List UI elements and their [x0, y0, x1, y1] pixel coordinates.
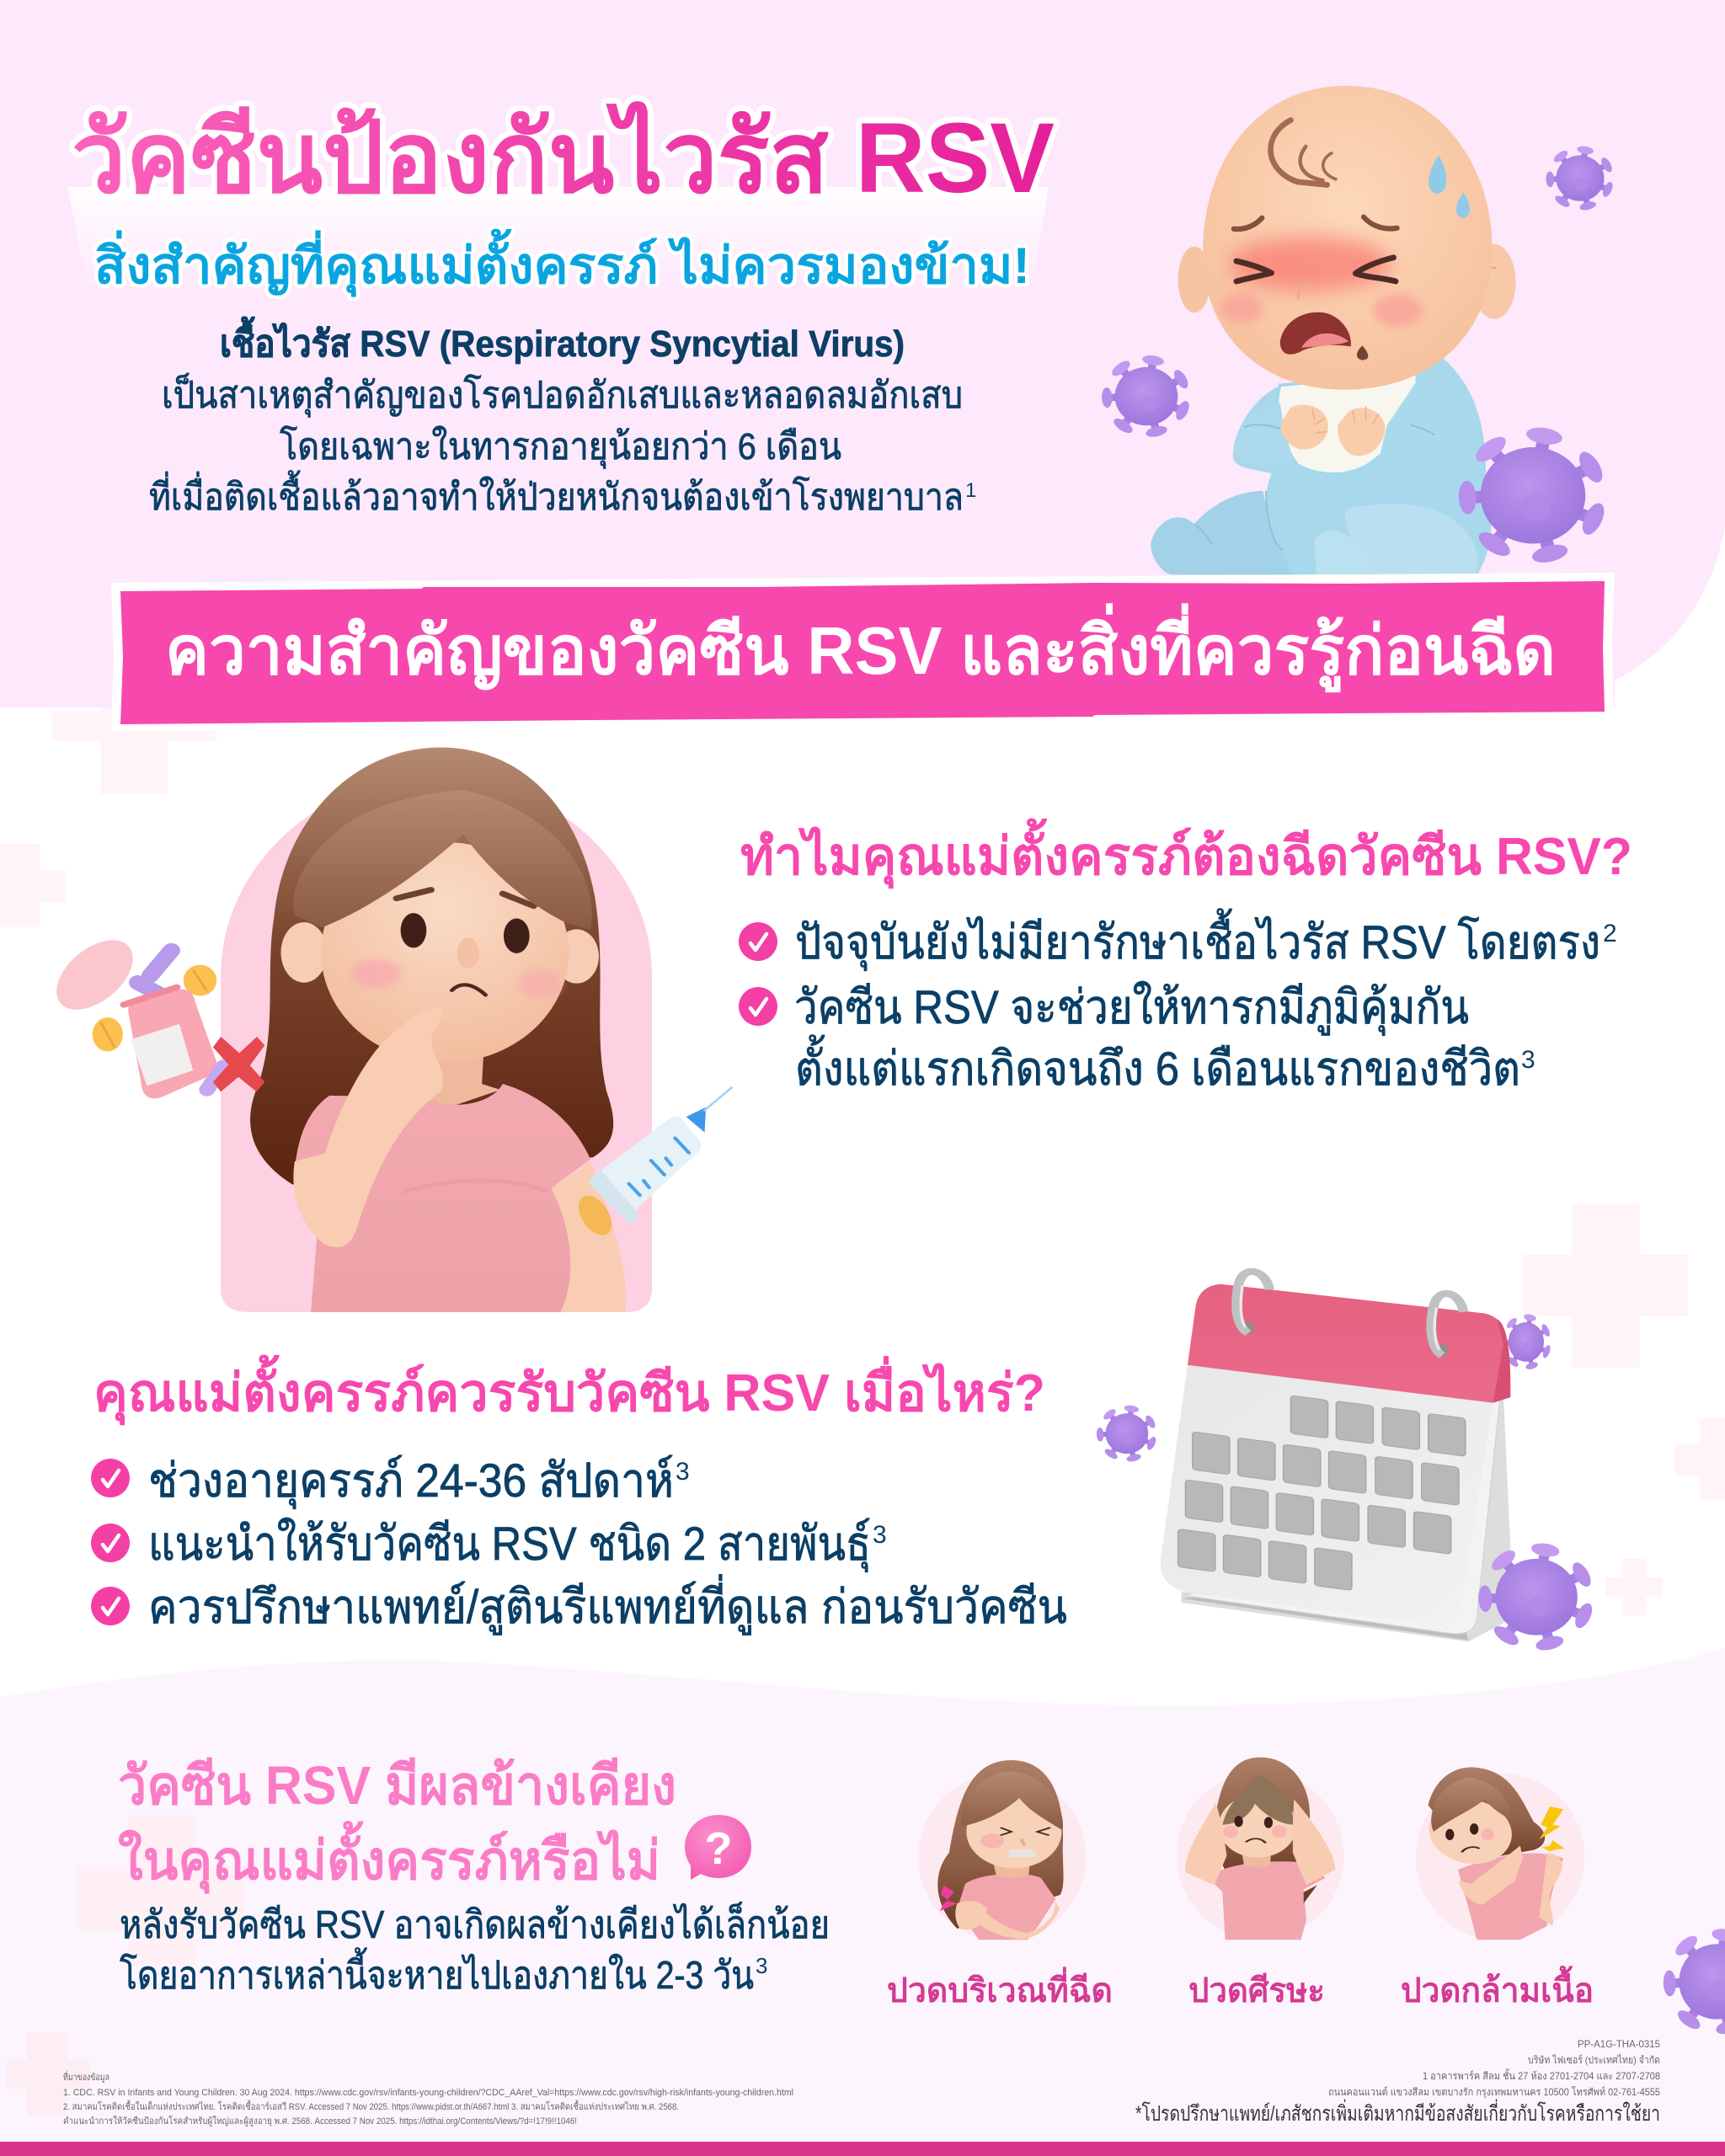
- intro text block: 1: [965, 479, 976, 502]
- side effects description: โดยอาการเหล่านี้จะหายไปเองภายใน 2-3 วัน: [120, 1947, 754, 1997]
- heading: when to vaccinate: คุณแม่ตั้งครรภ์ควรรับวัคซีน RSV เมื่อไหร่?: [93, 1354, 1045, 1425]
- company info: บริษัท ไฟเซอร์ (ประเทศไทย) จำกัด: [1528, 2054, 1660, 2066]
- virus large: [1458, 425, 1609, 566]
- illustration: desk calendar with viruses: [1097, 1272, 1595, 1652]
- title: วัคซีนป้องกันไวรัส RSV: [72, 101, 1055, 214]
- side effects description: [120, 1902, 830, 1997]
- timing list: 3: [873, 1521, 887, 1549]
- reasons list: วัคซีน RSV จะช่วยให้ทารกมีภูมิคุ้มกัน: [794, 980, 1469, 1036]
- icon: question bubble: [685, 1815, 751, 1880]
- company info: PP-A1G-THA-0315: [1578, 2038, 1660, 2050]
- baby arms and hands: [1234, 368, 1477, 473]
- icon: medicine bottle with X: [41, 928, 264, 1098]
- pink arch panel: [221, 775, 652, 1312]
- references: [63, 2070, 793, 2127]
- side effects description: หลังรับวัคซีน RSV อาจเกิดผลข้างเคียงได้เล็กน้อย: [120, 1902, 830, 1946]
- reasons list: ปัจจุบันยังไม่มียารักษาเชื้อไวรัส RSV โดยตรง: [795, 909, 1600, 971]
- heading: side effects: ในคุณแม่ตั้งครรภ์หรือไม่: [118, 1821, 660, 1894]
- virus left: [1102, 354, 1192, 439]
- baby legs and body: [1151, 355, 1492, 574]
- background: top pink blob: [0, 0, 1725, 707]
- hair back: [250, 748, 613, 1184]
- timing list: ควรปรึกษาแพทย์/สูตินรีแพทย์ที่ดูแล ก่อนรับวัคซีน: [148, 1574, 1067, 1636]
- figure: muscle pain: [1416, 1767, 1584, 1940]
- company info: 1 อาคารพาร์ค สีลม ชั้น 27 ห้อง 2701-2704 และ 2707-2708: [1423, 2068, 1660, 2082]
- calendar sheet: [1161, 1365, 1493, 1625]
- timing list: [91, 1454, 1067, 1636]
- background: bottom pale wave: [0, 1648, 1725, 2156]
- side effect figures: [918, 1758, 1584, 1940]
- illustration: pregnant woman: [41, 748, 732, 1312]
- timing list: 3: [676, 1458, 690, 1486]
- figure: injection site pain: [918, 1760, 1086, 1940]
- baby head: [1178, 86, 1516, 390]
- banner: [111, 573, 1615, 731]
- reasons list: 2: [1603, 920, 1617, 947]
- dress: [295, 1084, 625, 1312]
- calendar red header: [1188, 1284, 1506, 1403]
- side effect labels: ปวดบริเวณที่ฉีด: [887, 1967, 1113, 2009]
- heading: side effects: [118, 1755, 676, 1894]
- heading: why vaccine: ทำไมคุณแม่ตั้งครรภ์ต้องฉีดวัคซีน RSV?: [740, 818, 1632, 889]
- icon: question bubble: ?: [704, 1823, 733, 1874]
- references: คำแนะนำการให้วัคซีนป้องกันโรคสำหรับผู้ใหญ่และผู้สูงอายุ พ.ศ. 2568. Accessed 7 Nov 2025. https://idthai.org/Contents/Views/?d=!17!9!!1046!: [63, 2115, 577, 2127]
- side effect labels: ปวดกล้ามเนื้อ: [1401, 1966, 1594, 2009]
- reasons list: [739, 909, 1617, 1095]
- virus small top right: [1546, 145, 1615, 211]
- banner: ความสำคัญของวัคซีน RSV และสิ่งที่ควรรู้ก่อนฉีด: [165, 603, 1556, 693]
- bottom bar: [0, 2142, 1725, 2156]
- calendar back stand: [1182, 1395, 1514, 1641]
- side effect labels: ปวดศีรษะ: [1188, 1972, 1325, 2009]
- references: ที่มาของข้อมูล: [63, 2070, 109, 2083]
- timing list: แนะนำให้รับวัคซีน RSV ชนิด 2 สายพันธุ์: [148, 1517, 871, 1572]
- virus bottom of calendar: [1478, 1541, 1595, 1652]
- thinking arm and hand: [293, 1006, 443, 1247]
- background: medical crosses: [0, 707, 1725, 2116]
- company info: [1328, 2038, 1660, 2099]
- intro text block: ที่เมื่อติดเชื้อแล้วอาจทำให้ป่วยหนักจนต้องเข้าโรงพยาบาล: [149, 470, 964, 518]
- intro text block: เชื้อไวรัส RSV (Respiratory Syncytial Virus): [220, 316, 905, 365]
- calendar date squares: [1178, 1396, 1466, 1591]
- side effect labels: [887, 1966, 1594, 2009]
- baby bib: [1277, 372, 1418, 474]
- virus left of calendar: [1097, 1404, 1157, 1463]
- intro text block: เป็นสาเหตุสำคัญของโรคปอดอักเสบและหลอดลมอักเสบ: [162, 373, 963, 418]
- calendar pages: [1185, 1347, 1505, 1634]
- virus bottom right: [1663, 1927, 1725, 2036]
- references: 1. CDC. RSV in Infants and Young Children. 30 Aug 2024. https://www.cdc.gov/rsv/infants-young-children/?CDC_AAref_Val=https://www.cdc.gov/rsv/high-risk/infants-young-children.html: [63, 2088, 793, 2098]
- intro text block: [149, 316, 976, 518]
- heading: side effects: วัคซีน RSV มีผลข้างเคียง: [118, 1755, 676, 1816]
- subtitle: สิ่งสำคัญที่คุณแม่ตั้งครรภ์ ไม่ควรมองข้าม!: [94, 228, 1030, 297]
- right arm: [551, 1161, 626, 1312]
- ears and face: [281, 842, 599, 1063]
- intro text block: โดยเฉพาะในทารกอายุน้อยกว่า 6 เดือน: [280, 425, 841, 469]
- icon: syringe: [572, 1087, 732, 1240]
- title glow: [67, 187, 1049, 291]
- neck: [403, 1042, 500, 1107]
- illustration: crying baby with viruses: [1102, 86, 1615, 574]
- hair bangs: [293, 790, 592, 929]
- calendar virus behind: [1501, 1313, 1551, 1371]
- company info: ถนนคอนแวนต์ แขวงสีลม เขตบางรัก กรุงเทพมหานคร 10500 โทรศัพท์ 02-761-4555: [1328, 2086, 1660, 2099]
- reasons list: ตั้งแต่แรกเกิดจนถึง 6 เดือนแรกของชีวิต: [795, 1035, 1520, 1095]
- timing list: ช่วงอายุครรภ์ 24-36 สัปดาห์: [148, 1454, 674, 1509]
- calendar rings: [1236, 1272, 1463, 1357]
- side effects description: 3: [756, 1953, 767, 1978]
- figure: headache: [1177, 1758, 1344, 1940]
- references: 2. สมาคมโรคติดเชื้อในเด็กแห่งประเทศไทย. โรคติดเชื้ออาร์เอสวี RSV. Accessed 7 Nov 2025. https://www.pidst.or.th/A667.html 3. สมาคมโรคติดเชื้อแห่งประเทศไทย พ.ศ. 2568.: [63, 2100, 679, 2112]
- reasons list: 3: [1521, 1046, 1535, 1074]
